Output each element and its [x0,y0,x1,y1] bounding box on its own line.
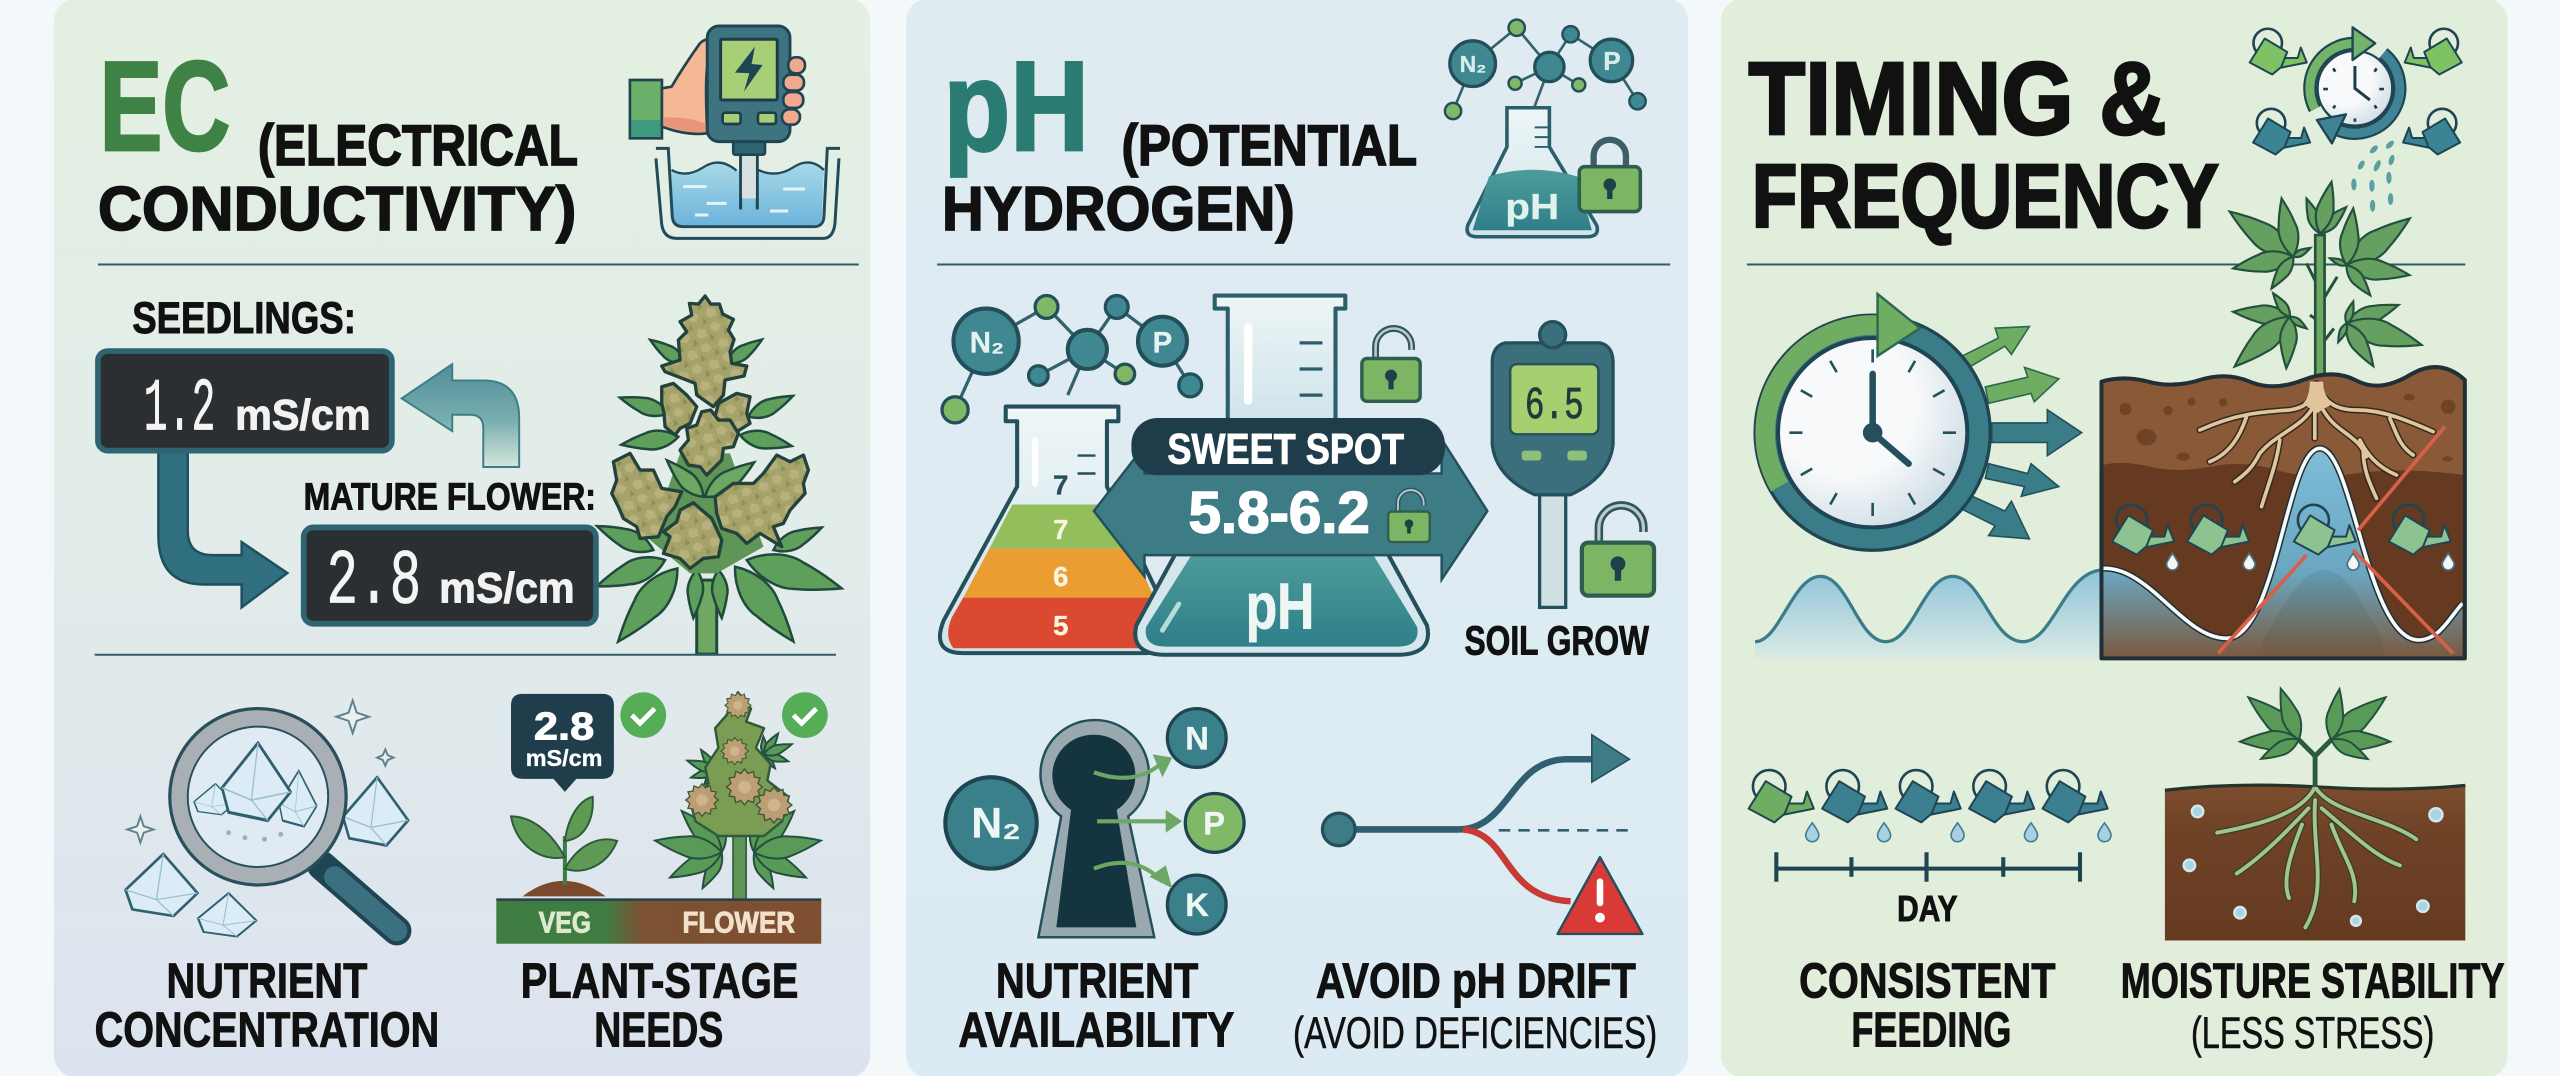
icon: pH scale flask: 7 [1053,470,1068,501]
banner: sweet spot 5.8-6.2: SWEET SPOT [1167,426,1404,473]
caption: consistent feeding: FEEDING [1851,1004,2011,1058]
caption: nutrient concentration: CONCENTRATION [95,1004,439,1058]
icon: keyhole with nutrients passing: P [1203,804,1225,841]
icon: open lock [1362,328,1420,401]
icon: pH meter reading 6.5: 6.5 [1525,380,1584,432]
icon: keyhole with nutrients passing: K [1185,886,1209,923]
icon: plant stages veg to flower: mS/cm [526,745,602,771]
icon: large teal flask with pH: pH [1246,570,1314,643]
heading: timing and frequency [1749,41,2219,247]
heading: EC [98,35,578,244]
icon: plant stages veg to flower: FLOWER [682,906,795,939]
icon: keyhole with nutrients passing: N [1185,719,1209,756]
caption: plant-stage needs [521,955,798,1058]
heading: pH: pH [944,35,1089,177]
icon: EC meter in hand dipped in water [630,26,840,238]
icon: large teal flask with pH [1135,539,1428,655]
caption: nutrient availability: NUTRIENT [996,955,1198,1009]
caption: nutrient availability: AVAILABILITY [958,1004,1234,1058]
icon: watering cans on day timeline: DAY [1897,888,1958,929]
icon: magnifying glass over salt crystals [126,700,408,937]
icon: keyhole with nutrients passing [945,709,1244,937]
readout: 1.2 mS/cm [98,351,392,452]
icon: plant stages veg to flower: 2.8 [534,706,594,749]
icon: pH drift diverging path with warning [1322,735,1642,934]
icon: plant stages veg to flower: VEG [539,906,591,939]
banner: sweet spot 5.8-6.2: 5.8-6.2 [1189,480,1370,545]
label: soil grow: SOIL GROW [1464,618,1649,664]
icon: pH scale flask: 7 [1053,514,1068,545]
caption: avoid pH drift [1293,955,1657,1058]
caption: plant-stage needs: NEEDS [594,1004,723,1058]
icon: flask, molecules and lock: pH [1505,186,1559,227]
icon: molecules N2 and P [942,296,1202,423]
panel: timing and frequency [1721,0,2508,1076]
divider line [98,264,859,266]
icon: clock with frequency arrows [1755,294,2082,550]
arrow: seedlings to mature flower [158,452,287,607]
heading: pH [942,35,1417,244]
panel: EC electrical conductivity [54,0,870,1076]
divider line [95,654,836,656]
heading: EC: CONDUCTIVITY) [98,175,576,244]
divider line [1747,264,2465,266]
readout: 2.8 mS/cm [304,527,596,626]
caption: consistent feeding [1799,955,2056,1058]
arrow: back to seedlings [402,364,519,467]
caption: nutrient concentration: NUTRIENT [167,955,367,1009]
readout: 2.8 mS/cm: mS/cm [439,564,575,611]
icon: pH meter reading 6.5 [1492,322,1613,607]
icon: molecules N2 and P: N₂ [970,327,1004,360]
icon: pH scale flask: 6 [1053,561,1068,592]
icon: flask, molecules and lock: P [1603,46,1621,76]
heading: pH: HYDROGEN) [942,175,1295,244]
icon: pH scale flask [940,407,1171,653]
heading: EC: (ELECTRICAL [258,114,578,178]
icon: flask, molecules and lock [1445,20,1646,237]
heading: pH: (POTENTIAL [1122,114,1417,178]
icon: beaker behind banner [1215,296,1345,421]
caption: moisture stability: (LESS STRESS) [2191,1009,2434,1058]
icon: stable soil with healthy roots [2165,686,2465,940]
icon: clock and watering cans cycle with young plant [2222,27,2462,380]
banner: sweet spot 5.8-6.2 [1094,418,1487,580]
icon: pH scale flask: 5 [1053,610,1068,641]
icon: watering cans on day timeline [1749,770,2111,929]
readout: 1.2 mS/cm: mS/cm [235,391,371,438]
icon: keyhole with nutrients passing: N₂ [971,800,1021,847]
caption: consistent feeding: CONSISTENT [1799,955,2056,1009]
label: mature flower: MATURE FLOWER: [304,475,596,517]
chart: soil cross-section with overwatering spike [2101,367,2465,658]
panel: pH potential hydrogen [906,0,1688,1076]
icon: plant stages veg to flower [496,692,828,944]
icon: cannabis flower plant [593,296,846,654]
icon: lock by meter [1582,505,1654,596]
caption: nutrient concentration [95,955,439,1058]
caption: plant-stage needs: PLANT-STAGE [521,955,798,1009]
readout: 1.2 mS/cm: 1.2 [144,366,216,452]
caption: avoid pH drift: AVOID pH DRIFT [1316,955,1636,1009]
readout: 2.8 mS/cm: 2.8 [327,537,421,626]
heading: timing and frequency: FREQUENCY [1752,147,2219,247]
icon: molecules N2 and P: P [1153,327,1172,360]
divider line [937,264,1670,266]
chart: moisture wave [1755,570,2103,658]
icon: flask, molecules and lock: N₂ [1460,51,1486,77]
heading: timing and frequency: TIMING & [1749,41,2167,156]
caption: nutrient availability [958,955,1234,1058]
caption: moisture stability [2121,955,2504,1058]
label: seedlings: SEEDLINGS: [132,294,356,343]
heading: EC: EC [100,35,230,177]
caption: avoid pH drift: (AVOID DEFICIENCIES) [1293,1009,1657,1058]
